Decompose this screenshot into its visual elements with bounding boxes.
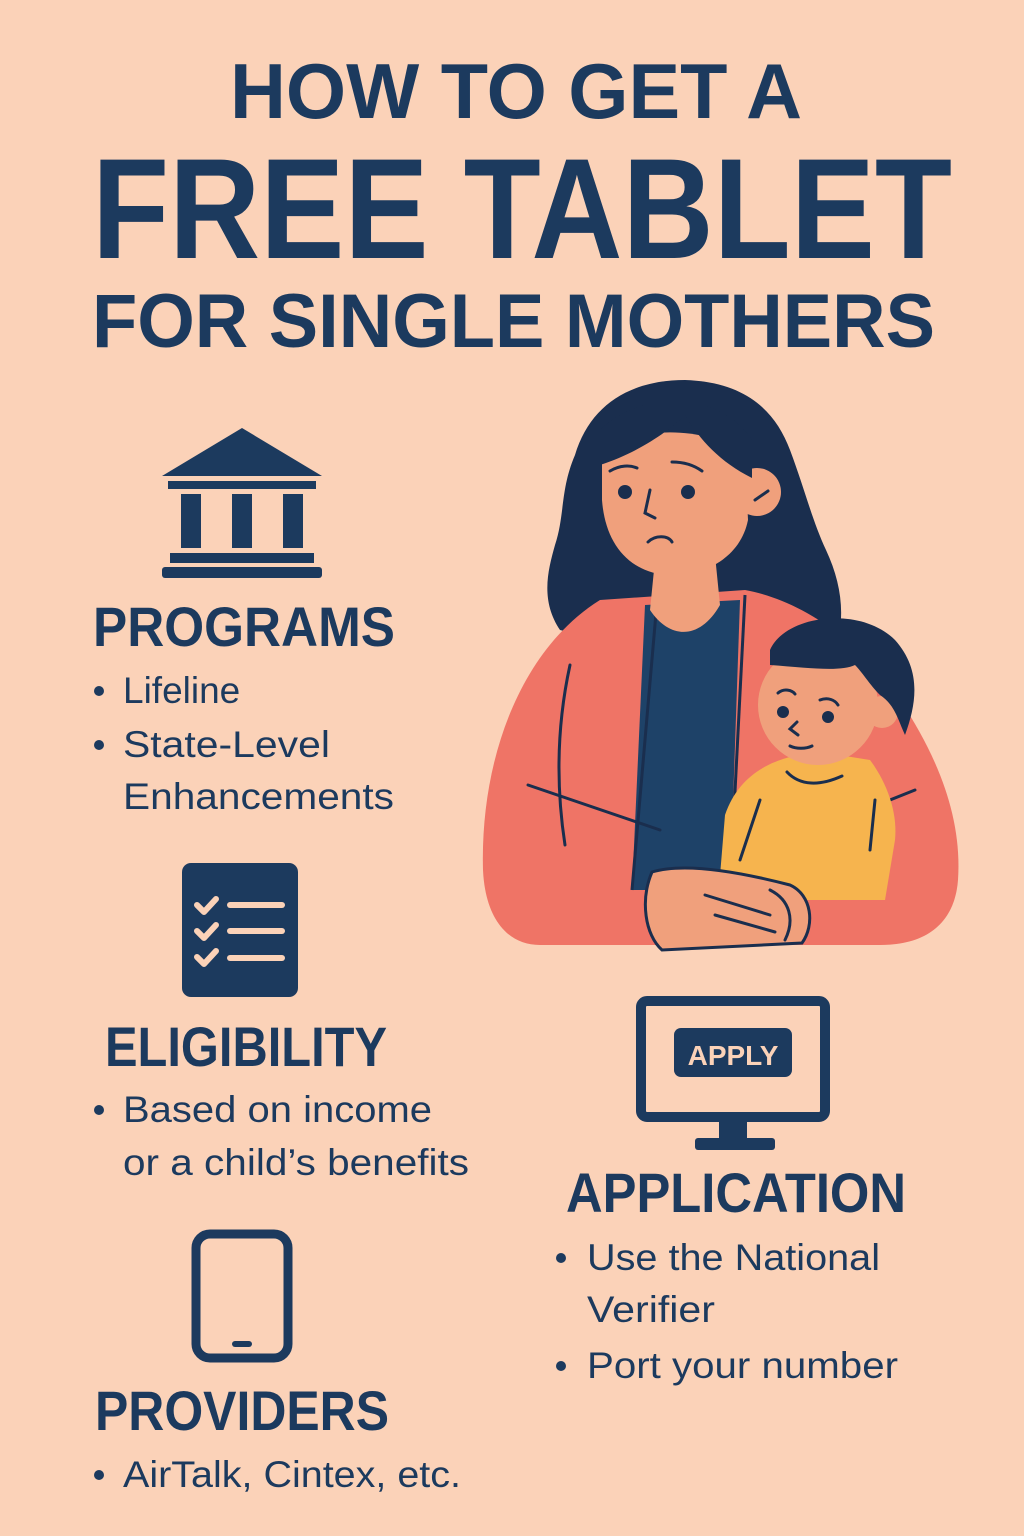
panel: eligibility: ELIGIBILITY — [105, 1015, 387, 1078]
panel: programs: Enhancements — [123, 776, 394, 817]
child shirt — [718, 752, 895, 900]
neck — [650, 555, 720, 632]
icon: government building — [162, 428, 322, 578]
panel: programs: State-Level — [123, 724, 330, 765]
shirt — [632, 600, 740, 890]
panel: programs: PROGRAMS — [93, 595, 395, 658]
panel: application: APPLICATION — [566, 1161, 906, 1224]
child head — [758, 645, 878, 765]
panel: application: Use the National — [587, 1237, 880, 1278]
panel: application: Port your number — [587, 1345, 898, 1386]
face — [602, 432, 748, 575]
icon: tablet — [196, 1234, 288, 1358]
title: HOW TO GET A — [230, 47, 802, 135]
panel: application — [556, 1161, 906, 1386]
panel: eligibility: or a child’s benefits — [123, 1142, 469, 1183]
panel: programs — [93, 595, 395, 817]
panel: eligibility: Based on income — [123, 1089, 432, 1130]
panel: application: Verifier — [587, 1289, 715, 1330]
title — [92, 47, 952, 364]
panel: providers: AirTalk, Cintex, etc. — [123, 1454, 461, 1495]
panel: programs: Lifeline — [123, 670, 240, 711]
panel: providers — [94, 1379, 461, 1495]
icon: apply monitor: APPLY — [688, 1040, 779, 1071]
hands — [645, 868, 810, 950]
icon: checklist — [182, 863, 298, 997]
title: FOR SINGLE MOTHERS — [92, 279, 935, 364]
cardigan body — [483, 590, 958, 945]
hair back — [547, 380, 841, 640]
panel: providers: PROVIDERS — [95, 1379, 389, 1442]
illustration: mother and child — [483, 380, 958, 950]
icon: apply monitor — [641, 1001, 825, 1150]
panel: eligibility — [94, 1015, 469, 1183]
